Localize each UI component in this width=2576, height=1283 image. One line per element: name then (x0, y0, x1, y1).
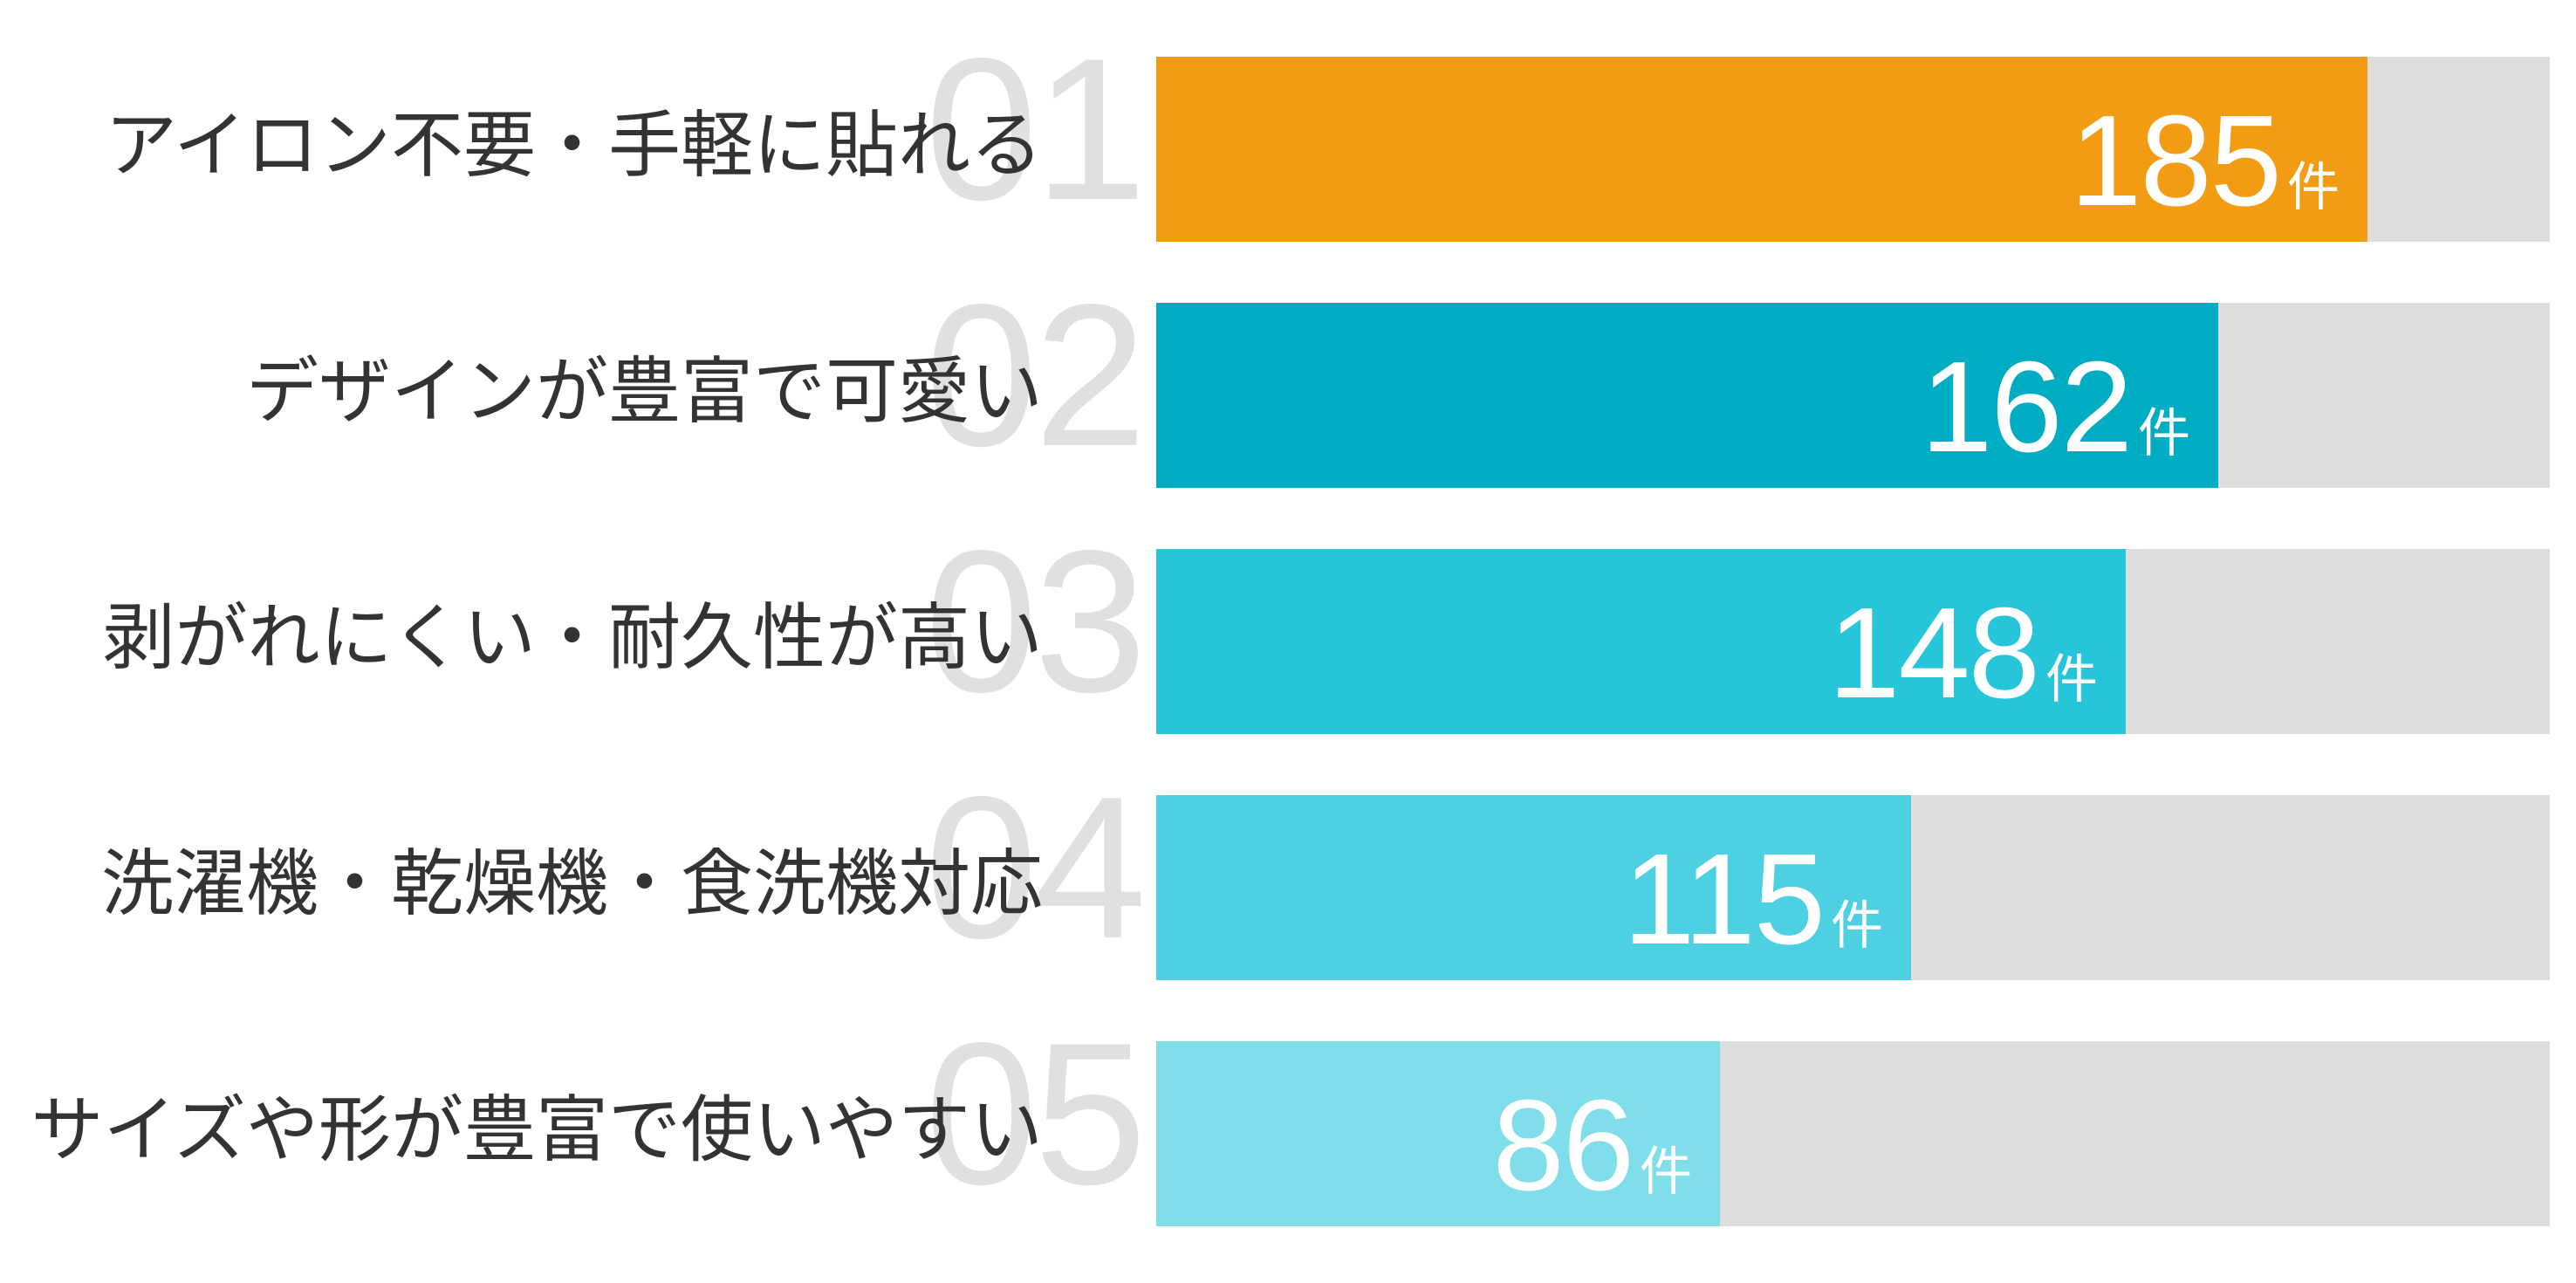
row 2 (246, 263, 2550, 489)
bar 1 (1156, 57, 2550, 242)
bar 5: 86件 (1492, 1074, 1692, 1218)
bar 1: 185件 (2070, 89, 2340, 233)
watermark number 04: 04 (925, 755, 1143, 981)
bar 3 (1156, 549, 2550, 734)
bar 2 (1156, 303, 2550, 488)
label 1: アイロン不要・手軽に貼れる (105, 105, 1043, 186)
bar 5 (1156, 1041, 2550, 1226)
label 3: 剥がれにくい・耐久性が高い (103, 597, 1043, 678)
row 1 (105, 17, 2550, 243)
label 4: 洗濯機・乾燥機・食洗機対応 (101, 843, 1043, 924)
label 2: デザインが豊富で可愛い (246, 351, 1043, 432)
bar 3: 148件 (1828, 581, 2098, 725)
watermark number 05: 05 (925, 1001, 1143, 1227)
label 5: サイズや形が豊富で使いやすい (31, 1089, 1043, 1170)
row 3 (103, 509, 2550, 735)
watermark number 03: 03 (925, 509, 1143, 735)
watermark number 01: 01 (925, 17, 1143, 243)
row 5 (31, 1001, 2550, 1227)
row 4 (101, 755, 2550, 981)
bar 4: 115件 (1623, 827, 1883, 971)
watermark number 02: 02 (925, 263, 1143, 489)
bar 2: 162件 (1921, 335, 2190, 479)
bar 4 (1156, 795, 2550, 980)
